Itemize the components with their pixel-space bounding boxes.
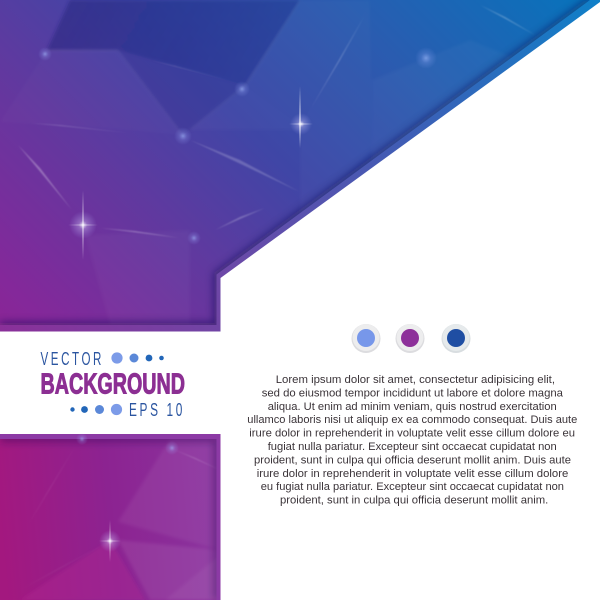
label: VECTOR: VECTOR (40, 349, 104, 369)
star: bottom sparkle (76, 433, 179, 562)
logo: vector background eps 10 (40, 349, 185, 420)
text block: lorem ipsum: proident, sunt in culpa qui officia deserunt mollit anim. Duis aute (254, 454, 571, 466)
text block: lorem ipsum: fugiat nulla pariatur. Excepteur sint occaecat cupidatat non (268, 441, 557, 453)
heading: BACKGROUND: BACKGROUND (40, 368, 185, 400)
dots: bottom row (70, 404, 122, 415)
panel: top polygon background (0, 0, 600, 332)
text block: lorem ipsum: sed do eiusmod tempor incididunt ut labore et dolore magna (262, 387, 564, 399)
swatch: purple (396, 324, 424, 353)
swatch: dark blue (442, 324, 470, 353)
rays (5, 5, 535, 238)
label: EPS 10: EPS 10 (129, 400, 185, 420)
text block: lorem ipsum: eu fugiat nulla pariatur. Excepteur sint occaecat cupidatat non (261, 481, 564, 493)
panel: bottom polygon background (0, 434, 220, 600)
text block: lorem ipsum: irure dolor in reprehenderit in voluptate velit esse cillum dolore (257, 468, 568, 480)
star: right sparkle (289, 86, 313, 148)
top inner shadow (0, 0, 590, 325)
text block: lorem ipsum: ullamco laboris nisi ut aliquip ex ea commodo consequat. Duis aute (247, 414, 577, 426)
text block: lorem ipsum: aliqua. Ut enim ad minim veniam, quis nostrud exercitation (268, 401, 557, 413)
text block: lorem ipsum: Lorem ipsum dolor sit amet, consectetur adipisicing elit, (276, 374, 555, 386)
star: small glows (38, 47, 437, 245)
text block: lorem ipsum (247, 374, 577, 507)
swatch: light blue (352, 324, 380, 353)
star: large left sparkle (68, 190, 98, 260)
dots: top row (111, 352, 164, 364)
text block: lorem ipsum: irure dolor in reprehenderit in voluptate velit esse cillum dolore eu (249, 428, 575, 440)
colour swatches (352, 324, 470, 353)
text block: lorem ipsum: proident, sunt in culpa qui officia deserunt mollit anim. (280, 495, 548, 507)
